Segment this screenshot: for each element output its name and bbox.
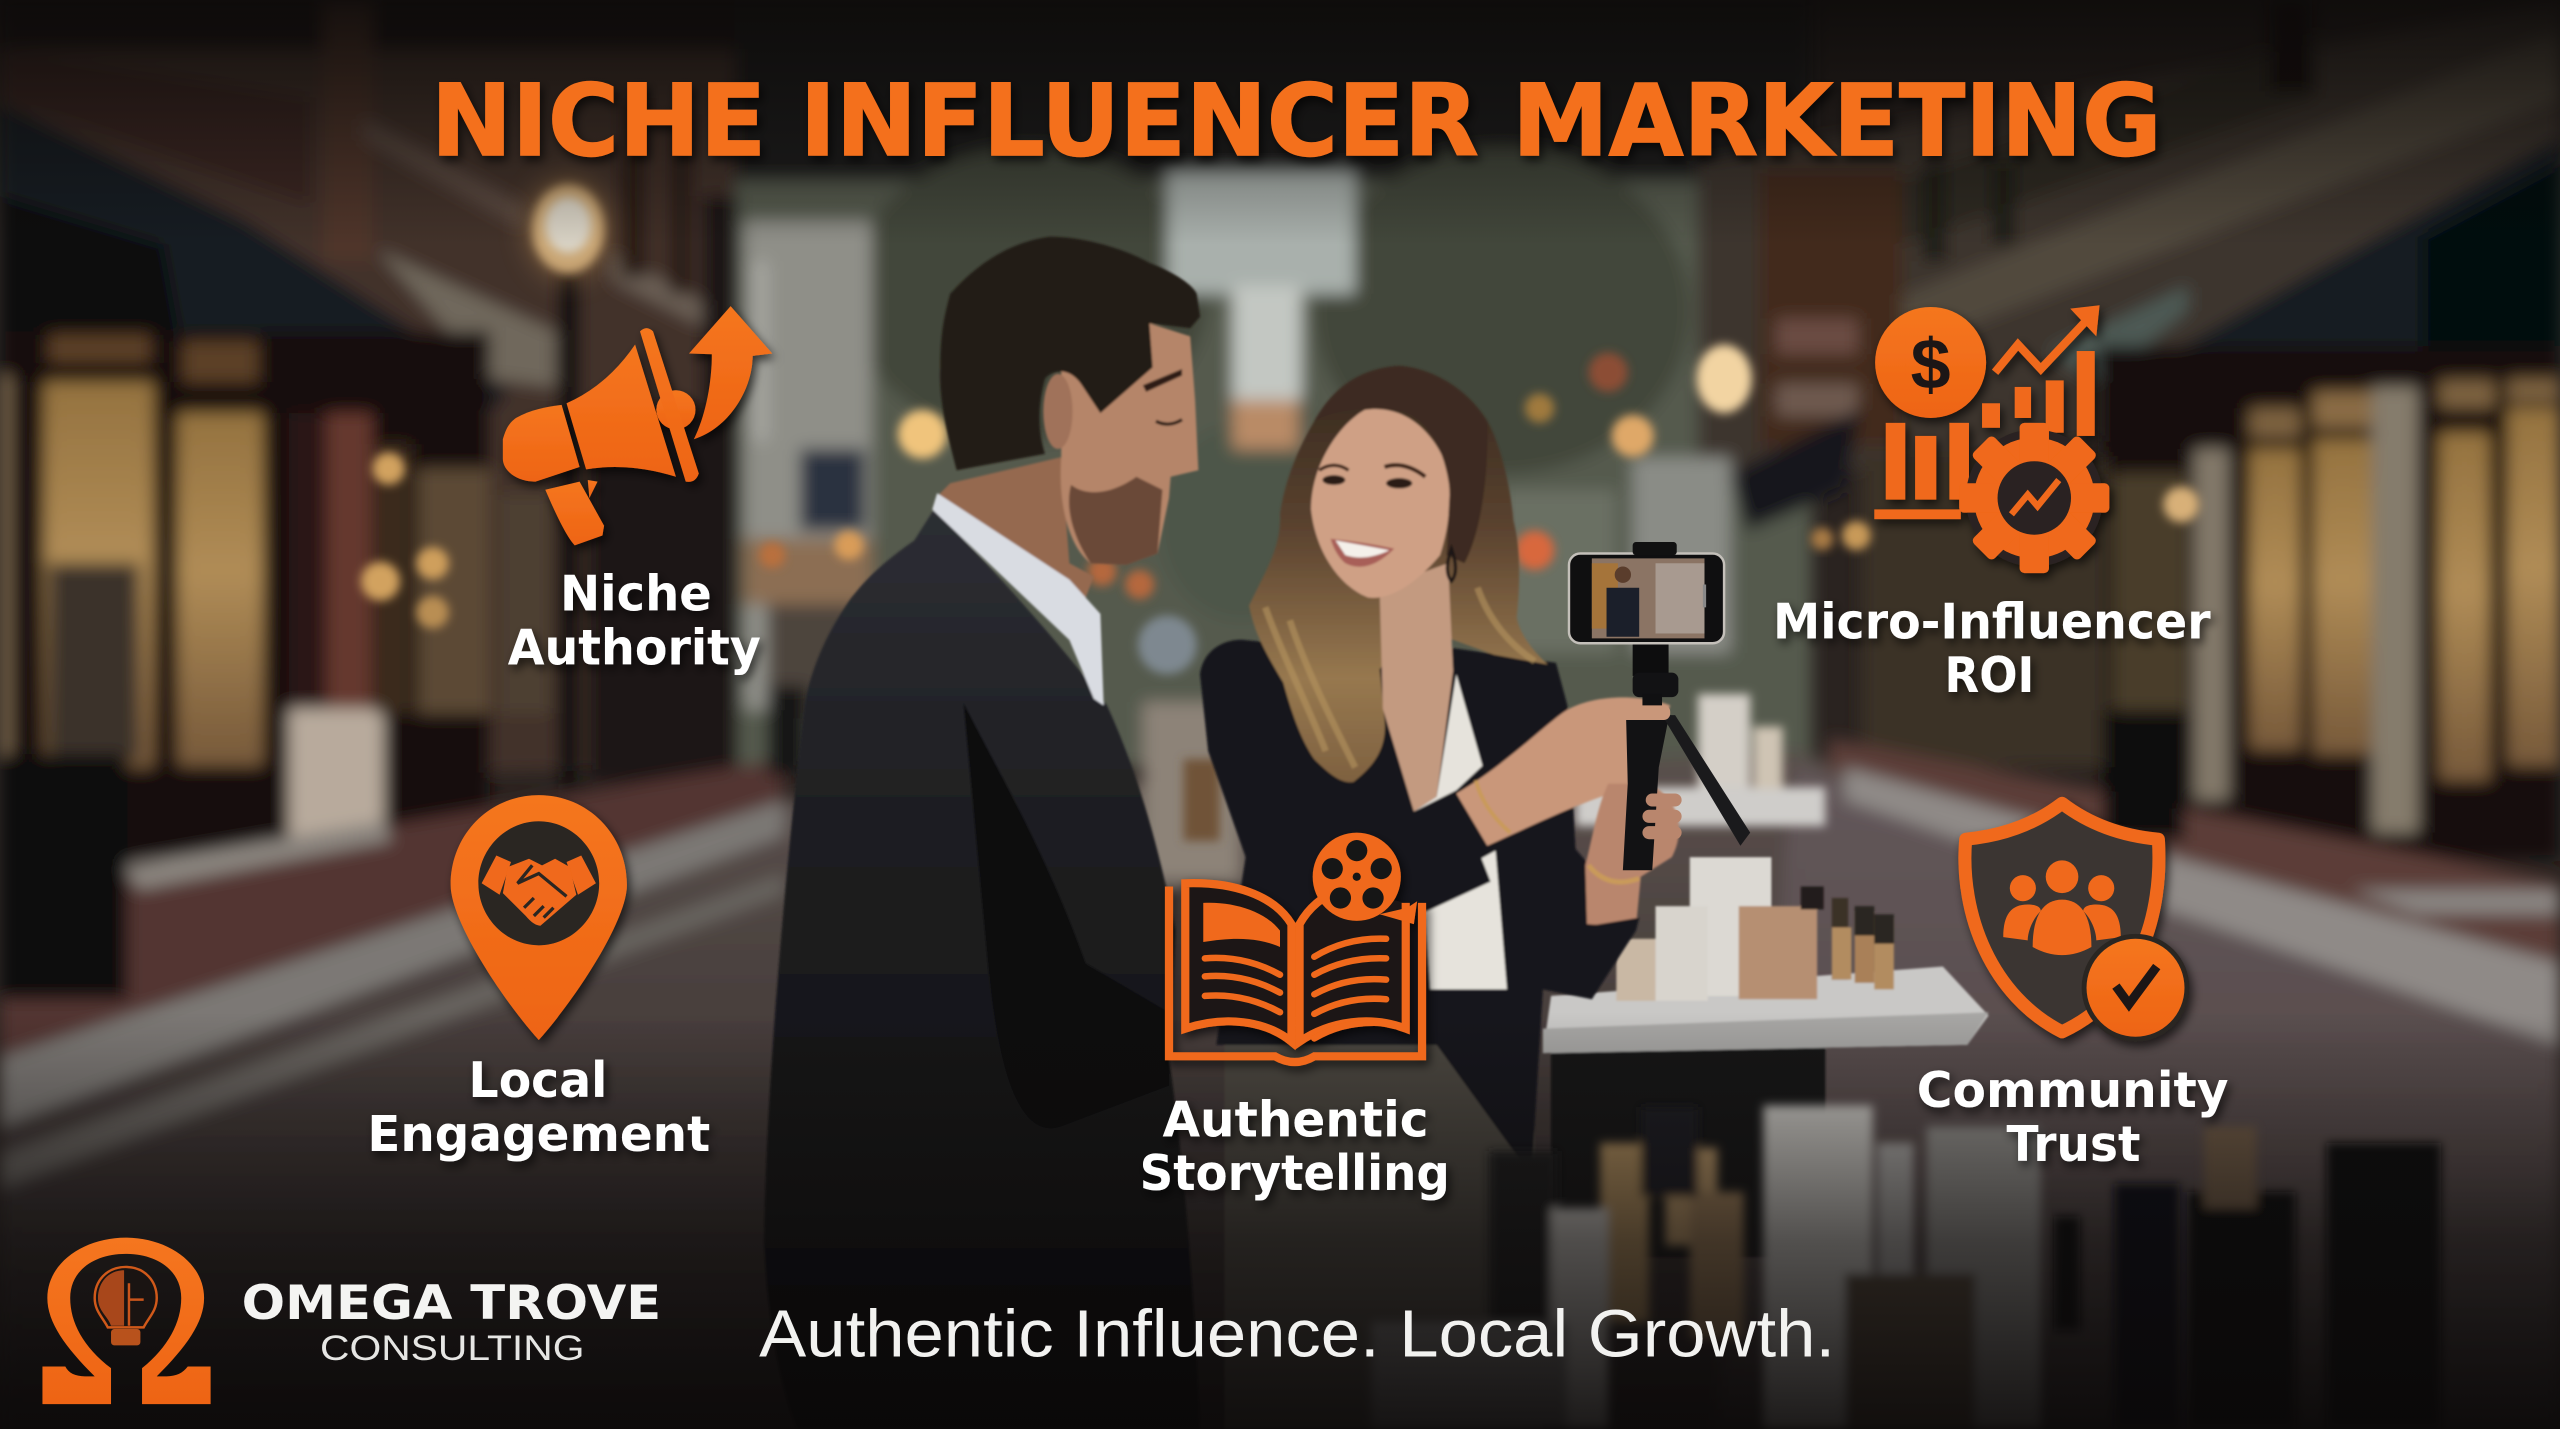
foreground blurred products [1371, 1105, 2441, 1429]
film reel [1313, 833, 1417, 924]
phone on tripod [1569, 542, 1750, 870]
face [1061, 323, 1198, 565]
label: Niche [560, 566, 712, 623]
lamp post [558, 269, 580, 792]
label [367, 1052, 710, 1163]
blouse [1383, 674, 1507, 989]
title: NICHE INFLUENCER MARKETING [431, 64, 2162, 179]
fingers on handle [1608, 705, 1682, 839]
bracelet [1476, 780, 1510, 833]
hair [940, 237, 1200, 470]
neck and chest [1380, 563, 1453, 811]
right awning [2101, 137, 2560, 428]
forearm and raised hand [1456, 697, 1670, 846]
label: ROI [1944, 647, 2034, 704]
phone [1569, 553, 1724, 643]
sleeve fold [963, 702, 1169, 1128]
label [508, 566, 761, 676]
label [1140, 1091, 1450, 1202]
hair front sweep [1314, 366, 1488, 563]
face [1311, 409, 1450, 598]
sleeve cuff [1371, 793, 1491, 914]
icon: map pin with handshake [451, 795, 627, 1040]
shirt collar [932, 493, 1104, 705]
right building [1698, 0, 2560, 490]
beard [1069, 477, 1162, 565]
label: Community [1917, 1062, 2229, 1119]
lamp glows [361, 180, 2199, 674]
jacket [764, 509, 1200, 1429]
woman presenter [1200, 366, 1679, 1429]
eyes, brows, mouth [1319, 465, 1425, 567]
label: Authentic [1162, 1091, 1429, 1148]
road and sidewalks [0, 751, 2560, 1429]
left storefront [0, 331, 490, 857]
sky and trees [702, 0, 1812, 767]
logo: Omega Trove Consulting [42, 1238, 661, 1404]
panel: Community Trust [1917, 803, 2229, 1173]
neck [937, 457, 1094, 640]
product table behind the presenters [1184, 694, 1989, 1257]
label: Trust [2007, 1116, 2140, 1173]
gear [1959, 423, 2109, 573]
icon: open book with film reel [1169, 833, 1422, 1062]
pale building left of the man [744, 220, 872, 710]
panel: Niche Authority [503, 306, 772, 676]
label: Storytelling [1140, 1145, 1450, 1202]
icon: megaphone with up arrow [503, 306, 772, 545]
label: Authority [508, 619, 761, 676]
coin: $ [1911, 325, 1951, 405]
label: Engagement [367, 1106, 710, 1163]
right storefront [2098, 346, 2560, 860]
left building [0, 0, 735, 784]
icon: omega with light bulb [42, 1238, 211, 1404]
panel: Local Engagement [367, 795, 710, 1163]
man presenter [764, 237, 1200, 1429]
label [1773, 593, 2211, 704]
left awning [0, 101, 509, 411]
lower hand and wrist [1585, 784, 1679, 927]
brand subtitle: CONSULTING [320, 1329, 584, 1368]
hair highlights [1265, 588, 1535, 767]
coin [1875, 307, 1986, 418]
eye and brow [1143, 369, 1182, 392]
label: Local [469, 1052, 607, 1109]
panel: Micro-Influencer ROI [1773, 305, 2211, 704]
icon: coin, bars, gear and growth line [1874, 305, 2109, 573]
trash cans [0, 754, 127, 999]
hair [1249, 366, 1548, 782]
panel: Authentic Storytelling [1140, 833, 1450, 1202]
tagline: Authentic Influence. Local Growth. [759, 1297, 1835, 1372]
jacket [1200, 640, 1636, 1176]
earring [1447, 549, 1456, 581]
brand name: OMEGA TROVE [242, 1276, 661, 1331]
ear [1043, 374, 1073, 449]
icon: shield with people and check badge [1965, 803, 2189, 1042]
trousers [1224, 1020, 1543, 1429]
label: Micro-Influencer [1773, 593, 2211, 650]
label [1917, 1062, 2229, 1173]
